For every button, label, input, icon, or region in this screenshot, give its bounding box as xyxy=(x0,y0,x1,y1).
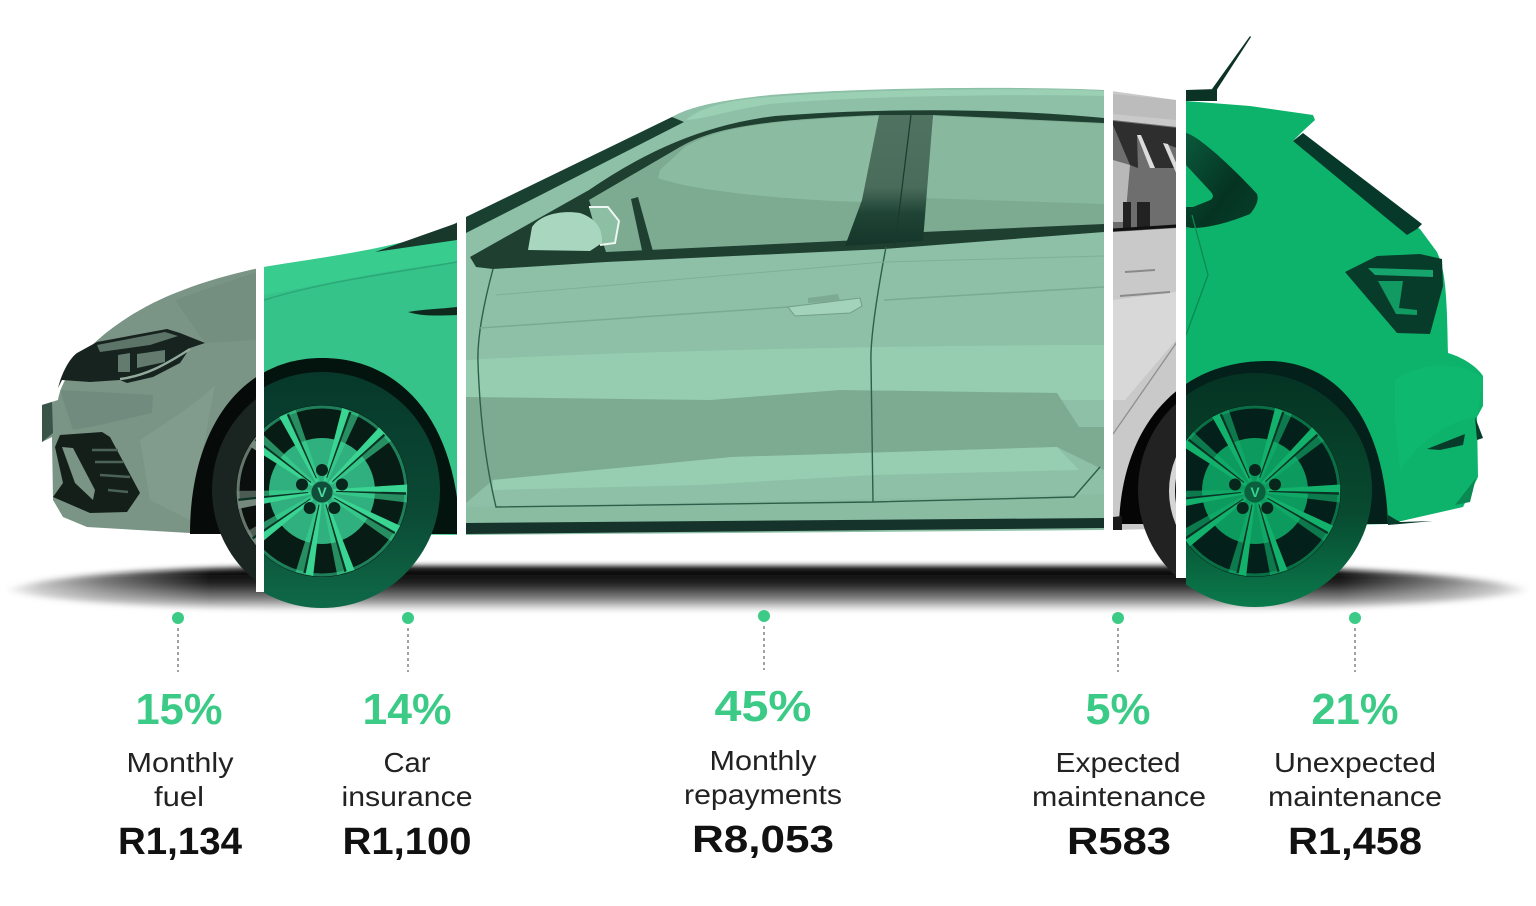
bumper shading xyxy=(1477,416,1478,417)
callout: expected maintenance xyxy=(1032,612,1206,863)
callout: unexpected maintenance: R1,458 xyxy=(1288,821,1422,863)
ground shadow xyxy=(0,555,1536,620)
callout: unexpected maintenance: 21% xyxy=(1312,685,1398,734)
callout: unexpected maintenance xyxy=(1268,612,1442,863)
tyre xyxy=(1186,373,1372,607)
door line xyxy=(1186,215,1208,335)
sill xyxy=(466,518,1104,534)
rear window xyxy=(1293,133,1422,235)
callout: expected maintenance: R583 xyxy=(1067,821,1171,863)
bumper grille xyxy=(53,432,140,513)
hub emblem: V xyxy=(317,484,327,500)
white divider gaps xyxy=(256,90,1186,592)
tyre xyxy=(1138,404,1176,576)
callout: unexpected maintenance: maintenance xyxy=(1268,781,1442,812)
roof cap xyxy=(1186,89,1217,101)
front window xyxy=(589,115,879,252)
side marker xyxy=(408,307,457,316)
callout: unexpected maintenance: Unexpected xyxy=(1274,747,1436,778)
door shading xyxy=(466,345,1104,400)
tyre xyxy=(264,372,440,608)
door shading xyxy=(1113,292,1176,400)
hub emblem xyxy=(1244,481,1266,503)
headlight xyxy=(58,329,205,388)
car section: monthly repayments (pale green) xyxy=(466,88,1104,535)
tail light xyxy=(1345,254,1443,334)
callout: monthly fuel: Monthly xyxy=(126,747,234,778)
front tab xyxy=(42,402,53,442)
callout: monthly fuel: fuel xyxy=(154,781,204,812)
quarter window xyxy=(1186,133,1258,228)
callout: monthly repayments xyxy=(684,610,842,861)
car section: car insurance (green) xyxy=(264,222,457,608)
window frame xyxy=(470,110,1104,269)
rear side window xyxy=(1113,120,1177,232)
door handle xyxy=(788,294,862,316)
antenna xyxy=(1212,36,1251,91)
callout: expected maintenance: Expected xyxy=(1056,747,1180,778)
rear window xyxy=(923,115,1104,232)
steering wheel stalk xyxy=(631,197,652,250)
a-pillar strip xyxy=(466,117,684,233)
callout: monthly fuel: R1,134 xyxy=(118,821,242,863)
hub emblem: V xyxy=(1250,484,1260,500)
callout: monthly fuel: 15% xyxy=(136,685,222,734)
b pillar xyxy=(845,115,933,246)
callout: expected maintenance: 5% xyxy=(1086,685,1150,734)
callout: car insurance xyxy=(342,612,472,863)
callout: monthly repayments: repayments xyxy=(684,779,842,810)
callout: monthly repayments: Monthly xyxy=(710,745,816,776)
door lines xyxy=(478,247,1100,507)
callout: monthly repayments: 45% xyxy=(714,682,812,731)
callout: car insurance: 14% xyxy=(362,685,452,734)
callout: expected maintenance: maintenance xyxy=(1032,781,1206,812)
car section: unexpected maintenance (strong green) xyxy=(1186,36,1483,607)
roof highlight xyxy=(686,89,1104,120)
car section: expected maintenance (grey) xyxy=(1113,91,1176,576)
callout: car insurance: Car xyxy=(384,747,430,778)
mirror xyxy=(528,207,619,251)
reflector xyxy=(1427,434,1465,450)
tyre xyxy=(212,399,256,579)
callout: car insurance: insurance xyxy=(342,781,472,812)
callout: car insurance: R1,100 xyxy=(342,821,472,863)
car section: monthly fuel (grey green front) xyxy=(42,268,256,579)
callout: monthly repayments: R8,053 xyxy=(692,819,834,861)
character line xyxy=(480,287,1104,328)
callout: monthly fuel xyxy=(118,612,242,863)
hub emblem xyxy=(311,481,333,503)
